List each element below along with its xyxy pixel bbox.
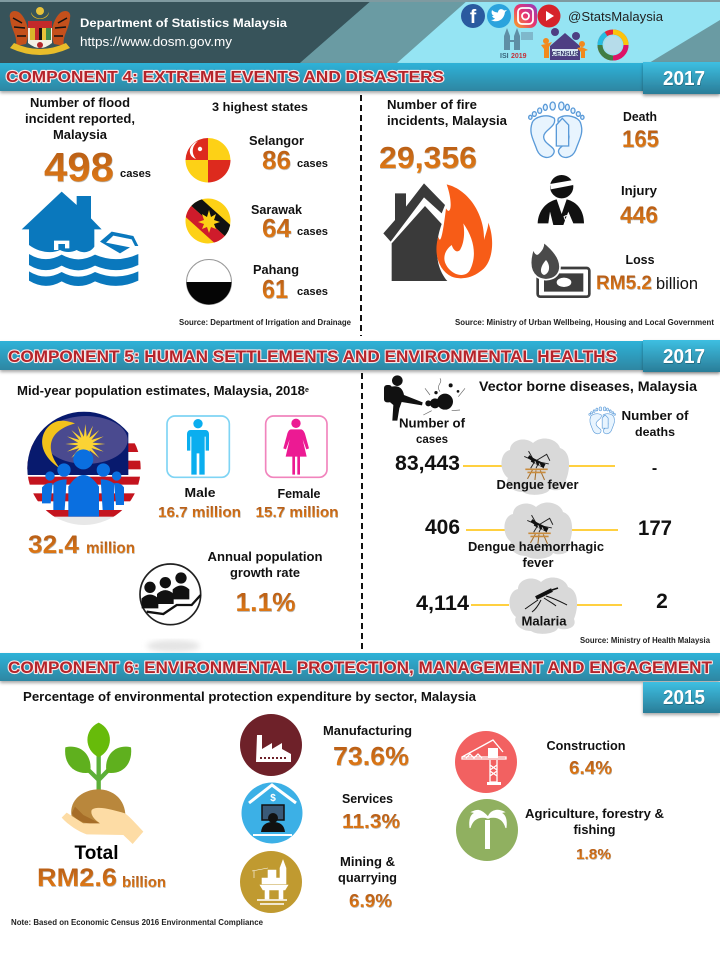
female figure (256, 486, 338, 521)
population heading: Mid-year population estimates, Malaysia, 2018 (17, 384, 305, 398)
panel: three highest states: 3 highest states (212, 100, 308, 114)
agriculture figure: Agriculture, forestry & (525, 807, 664, 821)
female figure: 15.7 million (256, 505, 338, 521)
row: dengue fever (395, 439, 657, 495)
flood total: 498 (44, 144, 114, 190)
icon: mining (240, 851, 302, 913)
mining figure: quarrying (338, 871, 397, 885)
mining figure: 6.9% (349, 891, 392, 911)
deaths column heading (622, 409, 689, 439)
Sarawak value: Sarawak (251, 202, 303, 217)
deaths column heading: deaths (635, 425, 675, 439)
banner: component 5: COMPONENT 5: HUMAN SETTLEMENTS AND ENVIRONMENTAL HEALTHS (8, 347, 617, 366)
injury figure: Injury (621, 183, 658, 198)
year tab 2017: 2017 (663, 68, 705, 90)
flood heading: incident reported, (25, 112, 135, 126)
panel: three highest states (175, 100, 351, 327)
services figure: 11.3% (342, 811, 400, 833)
social handle: @StatsMalaysia (568, 9, 664, 24)
Pahang value: cases (297, 286, 328, 298)
total population (28, 531, 135, 559)
cases column heading: cases (416, 432, 448, 446)
icon: services (242, 782, 302, 844)
flood heading: Malaysia (53, 128, 108, 142)
agriculture figure: 1.8% (576, 846, 611, 863)
logo: ISI 2019: ISI (500, 53, 509, 60)
flag: Pahang (186, 260, 232, 304)
row: dengue fever: 83,443 (395, 452, 460, 475)
total expenditure (37, 843, 166, 892)
row: malaria: 4,114 (416, 592, 469, 615)
panel: fire incidents (379, 98, 714, 327)
logo: census 2020 (541, 28, 588, 60)
Pahang value: Pahang (253, 262, 299, 277)
icon: feet with tag (529, 102, 584, 157)
icon: female (266, 416, 327, 477)
growth rate figure: 1.1% (236, 587, 296, 617)
row: malaria (416, 578, 668, 634)
icon: small feet (589, 407, 616, 434)
logo: ISI 2019 (500, 28, 533, 60)
construction figure (546, 739, 626, 778)
icon: injured person (538, 175, 584, 225)
Sarawak value: 64 (262, 213, 292, 243)
icon: services: $ (270, 793, 276, 804)
row: dengue haemorrhagic fever: fever (522, 556, 554, 570)
year tab 2015 (643, 682, 720, 713)
year tab 2017: 2017 (663, 346, 705, 368)
banner: component 4 (0, 63, 720, 91)
cases column heading: Number of (399, 416, 466, 430)
banner: component 5 (0, 341, 720, 370)
icon: Malaysian coat of arms (10, 7, 70, 55)
loss figure: Loss (626, 252, 654, 267)
year tab 2015: 2015 (663, 687, 705, 709)
vector heading: Vector borne diseases, Malaysia (479, 379, 698, 394)
cases column heading (399, 416, 466, 446)
Pahang value (253, 262, 328, 304)
flood heading (25, 96, 135, 142)
panel: environmental expenditure (11, 690, 664, 927)
panel: vector borne diseases (384, 375, 710, 645)
row: dengue haemorrhagic fever: 177 (638, 517, 672, 540)
icon: burning money (531, 242, 589, 297)
source: vector borne: Source: Ministry of Health Malaysia (580, 635, 710, 645)
row: dengue fever: Dengue fever (496, 478, 579, 492)
flood heading: Number of flood (30, 96, 130, 110)
agriculture figure: fishing (574, 823, 616, 837)
icon: manufacturing (240, 714, 302, 776)
year tab 2017 (643, 62, 720, 94)
Pahang value: 61 (262, 274, 288, 304)
source: flood: Source: Department of Irrigation and Drainage (179, 317, 351, 327)
flood total: cases (120, 168, 151, 180)
logo: census 2020: CENSUS (551, 50, 579, 58)
header title: https://www.dosm.gov.my (80, 34, 233, 49)
total expenditure: billion (122, 874, 166, 891)
row: dengue haemorrhagic fever: Dengue haemorrhagic (468, 540, 604, 554)
year tab 2017 (643, 340, 720, 372)
icon: male (167, 416, 229, 477)
icon: construction (455, 731, 517, 793)
total expenditure: RM2.6 (37, 864, 117, 892)
header band (0, 0, 720, 63)
death figure: Death (623, 109, 657, 124)
flood total (44, 144, 151, 190)
manufacturing figure: 73.6% (333, 741, 409, 771)
injury figure: 446 (620, 202, 658, 229)
logo: SDG wheel (600, 32, 626, 58)
icon: flooded house (22, 192, 138, 286)
Selangor value: 86 (262, 145, 291, 175)
services figure: Services (342, 792, 393, 806)
female figure: Female (278, 486, 320, 501)
fire total: 29,356 (379, 140, 477, 175)
mining figure: Mining & (340, 855, 395, 869)
manufacturing figure: Manufacturing (323, 724, 412, 738)
construction figure: Construction (546, 739, 626, 753)
note: Note: Based on Economic Census 2016 Environmental Compliance (11, 917, 263, 927)
banner: component 4: COMPONENT 4: EXTREME EVENTS AND DISASTERS (6, 69, 444, 86)
icon: hand with plant (62, 723, 143, 844)
banner: component 6 (0, 653, 720, 681)
total population: million (86, 540, 135, 557)
deaths column heading: Number of (622, 409, 689, 423)
growth rate figure (208, 550, 322, 617)
fire heading: Number of fire (387, 98, 477, 112)
population heading: e (305, 387, 309, 394)
Selangor value: Selangor (249, 133, 304, 148)
row: malaria: Malaria (522, 614, 568, 628)
row: dengue fever: - (652, 460, 657, 477)
icon: agriculture palm (456, 799, 518, 861)
banner: component 6: COMPONENT 6: ENVIRONMENTAL PROTECTION, MANAGEMENT AND ENGAGEMENT (8, 658, 713, 677)
icon: population growth (140, 564, 201, 652)
header title (80, 16, 287, 49)
construction figure: 6.4% (569, 758, 612, 778)
logo: ISI 2019: 2019 (511, 53, 527, 60)
loss figure: billion (656, 274, 698, 293)
panel: floods (22, 96, 151, 286)
social media icons (461, 4, 560, 28)
header title: Department of Statistics Malaysia (80, 16, 287, 30)
male figure: Male (184, 485, 216, 500)
injury figure (620, 183, 658, 229)
manufacturing figure (323, 724, 412, 771)
Selangor value (249, 133, 328, 175)
growth rate figure: Annual population (208, 550, 322, 564)
icon: fogging worker (384, 375, 465, 421)
growth rate figure: growth rate (230, 566, 300, 580)
mining figure (338, 855, 397, 911)
row: dengue haemorrhagic fever: 406 (425, 516, 460, 539)
Selangor value: cases (297, 158, 328, 170)
total expenditure: Total (74, 843, 118, 864)
fire heading: incidents, Malaysia (387, 114, 508, 128)
male figure (158, 485, 241, 521)
Sarawak value: cases (297, 226, 328, 238)
loss figure (596, 252, 698, 294)
row: dengue haemorrhagic fever (425, 503, 672, 570)
flag: Sarawak (186, 198, 230, 244)
male figure: 16.7 million (158, 505, 241, 521)
Sarawak value (251, 202, 328, 243)
icon: flag with people (27, 412, 142, 527)
panel: population (17, 384, 338, 652)
services figure (342, 792, 400, 833)
death figure: 165 (622, 126, 659, 153)
row: malaria: 2 (656, 590, 668, 613)
loss figure: RM5.2 (596, 273, 652, 294)
flag: Selangor (186, 138, 230, 183)
death figure (622, 109, 659, 153)
expenditure heading: Percentage of environmental protection expenditure by sector, Malaysia (23, 690, 477, 704)
agriculture figure (525, 807, 664, 863)
fire heading (387, 98, 508, 128)
social media icons: f (470, 7, 477, 28)
total population: 32.4 (28, 531, 79, 559)
icon: house on fire (383, 183, 492, 281)
